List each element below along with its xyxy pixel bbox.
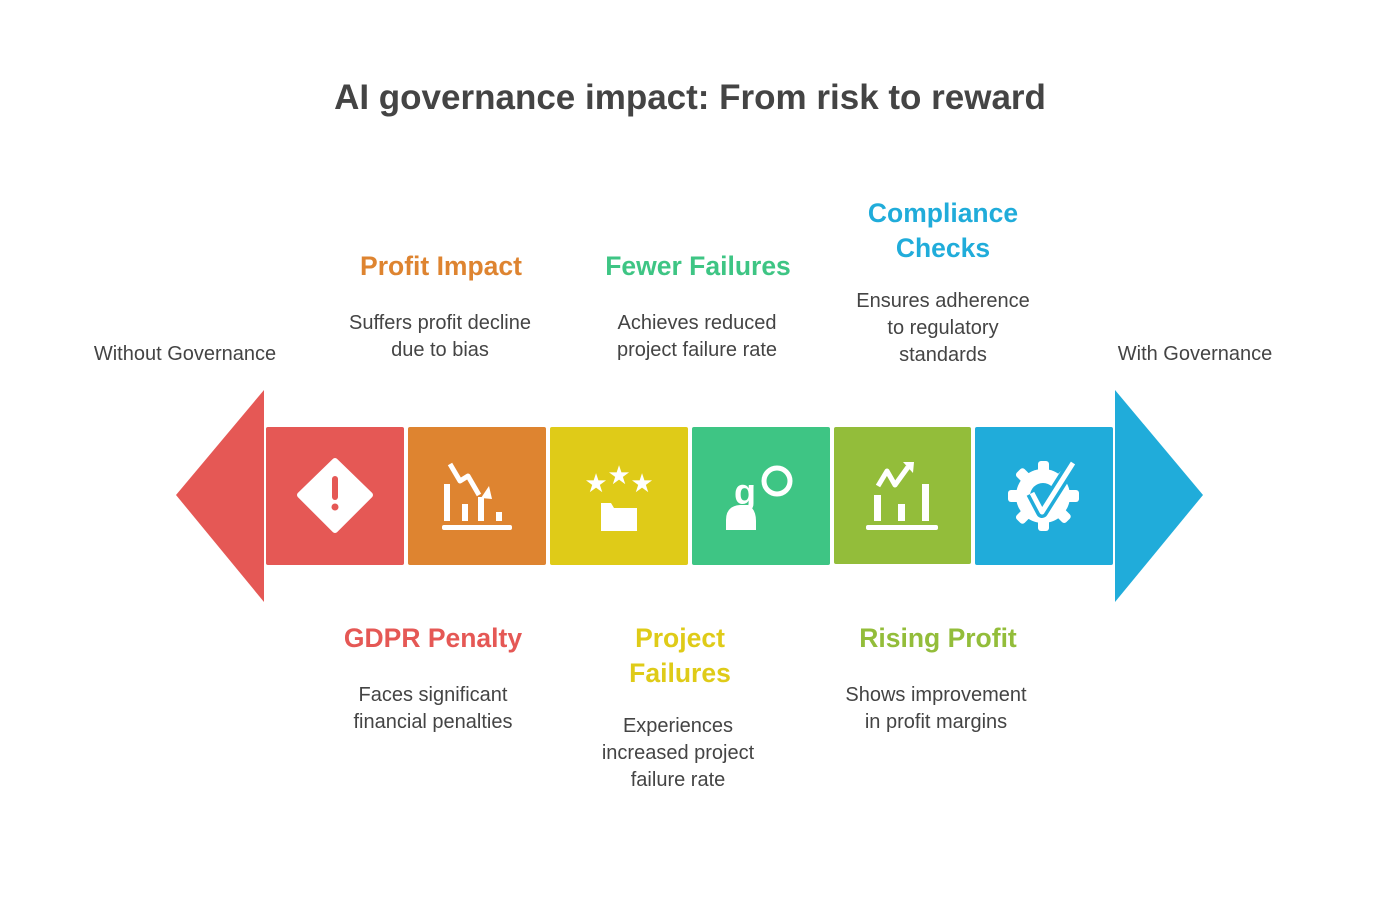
text: project failures: increased project xyxy=(602,742,754,764)
label: with governance: With Governance xyxy=(1118,343,1272,365)
text: project failures: Experiences xyxy=(623,715,733,737)
segment: fewer failures xyxy=(692,427,830,565)
heading: profit impact: Profit Impact xyxy=(360,251,522,281)
text: fewer failures: project failure rate xyxy=(617,339,777,361)
segment: project failures: ★ xyxy=(630,468,654,498)
text: gdpr penalty: financial penalties xyxy=(354,711,512,733)
text: project failures: failure rate xyxy=(631,769,725,791)
title: AI governance impact: From risk to reward xyxy=(334,78,1046,117)
text: profit impact: due to bias xyxy=(391,339,489,361)
segment: rising profit xyxy=(834,427,971,564)
segment: compliance xyxy=(975,427,1113,565)
text: rising profit: in profit margins xyxy=(865,711,1007,733)
segment: project failures xyxy=(550,427,688,565)
text: project failures xyxy=(602,715,754,791)
segment: gdpr xyxy=(266,427,404,565)
heading: rising profit: Rising Profit xyxy=(859,623,1017,653)
text: compliance checks xyxy=(856,290,1030,366)
text: gdpr penalty: Faces significant xyxy=(359,684,507,706)
text: fewer failures: Achieves reduced xyxy=(618,312,776,334)
heading: project failures: Project xyxy=(635,623,725,653)
text: compliance checks: standards xyxy=(899,344,987,366)
heading: project failures xyxy=(629,623,731,688)
text: gdpr penalty xyxy=(354,684,512,733)
heading: project failures: Failures xyxy=(629,658,731,688)
segment: fewer failures: g xyxy=(734,471,756,512)
arrow: right head xyxy=(1115,390,1203,602)
heading: fewer failures: Fewer Failures xyxy=(605,251,791,281)
text: rising profit xyxy=(845,684,1027,733)
heading: compliance checks: Compliance xyxy=(868,198,1018,228)
text: compliance checks: Ensures adherence xyxy=(856,290,1030,312)
label: without governance: Without Governance xyxy=(94,343,276,365)
segment: project failures: ★ xyxy=(584,468,608,498)
segment: project failures: ★ xyxy=(607,460,631,490)
text: rising profit: Shows improvement xyxy=(845,684,1027,706)
text: profit impact xyxy=(349,312,531,361)
arrow: left head xyxy=(176,390,264,602)
segment: profit decline xyxy=(408,427,546,565)
heading: gdpr penalty: GDPR Penalty xyxy=(344,623,522,653)
text: profit impact: Suffers profit decline xyxy=(349,312,531,334)
text: fewer failures xyxy=(617,312,777,361)
heading: compliance checks xyxy=(868,198,1018,263)
text: compliance checks: to regulatory xyxy=(887,317,999,339)
heading: compliance checks: Checks xyxy=(896,233,990,263)
